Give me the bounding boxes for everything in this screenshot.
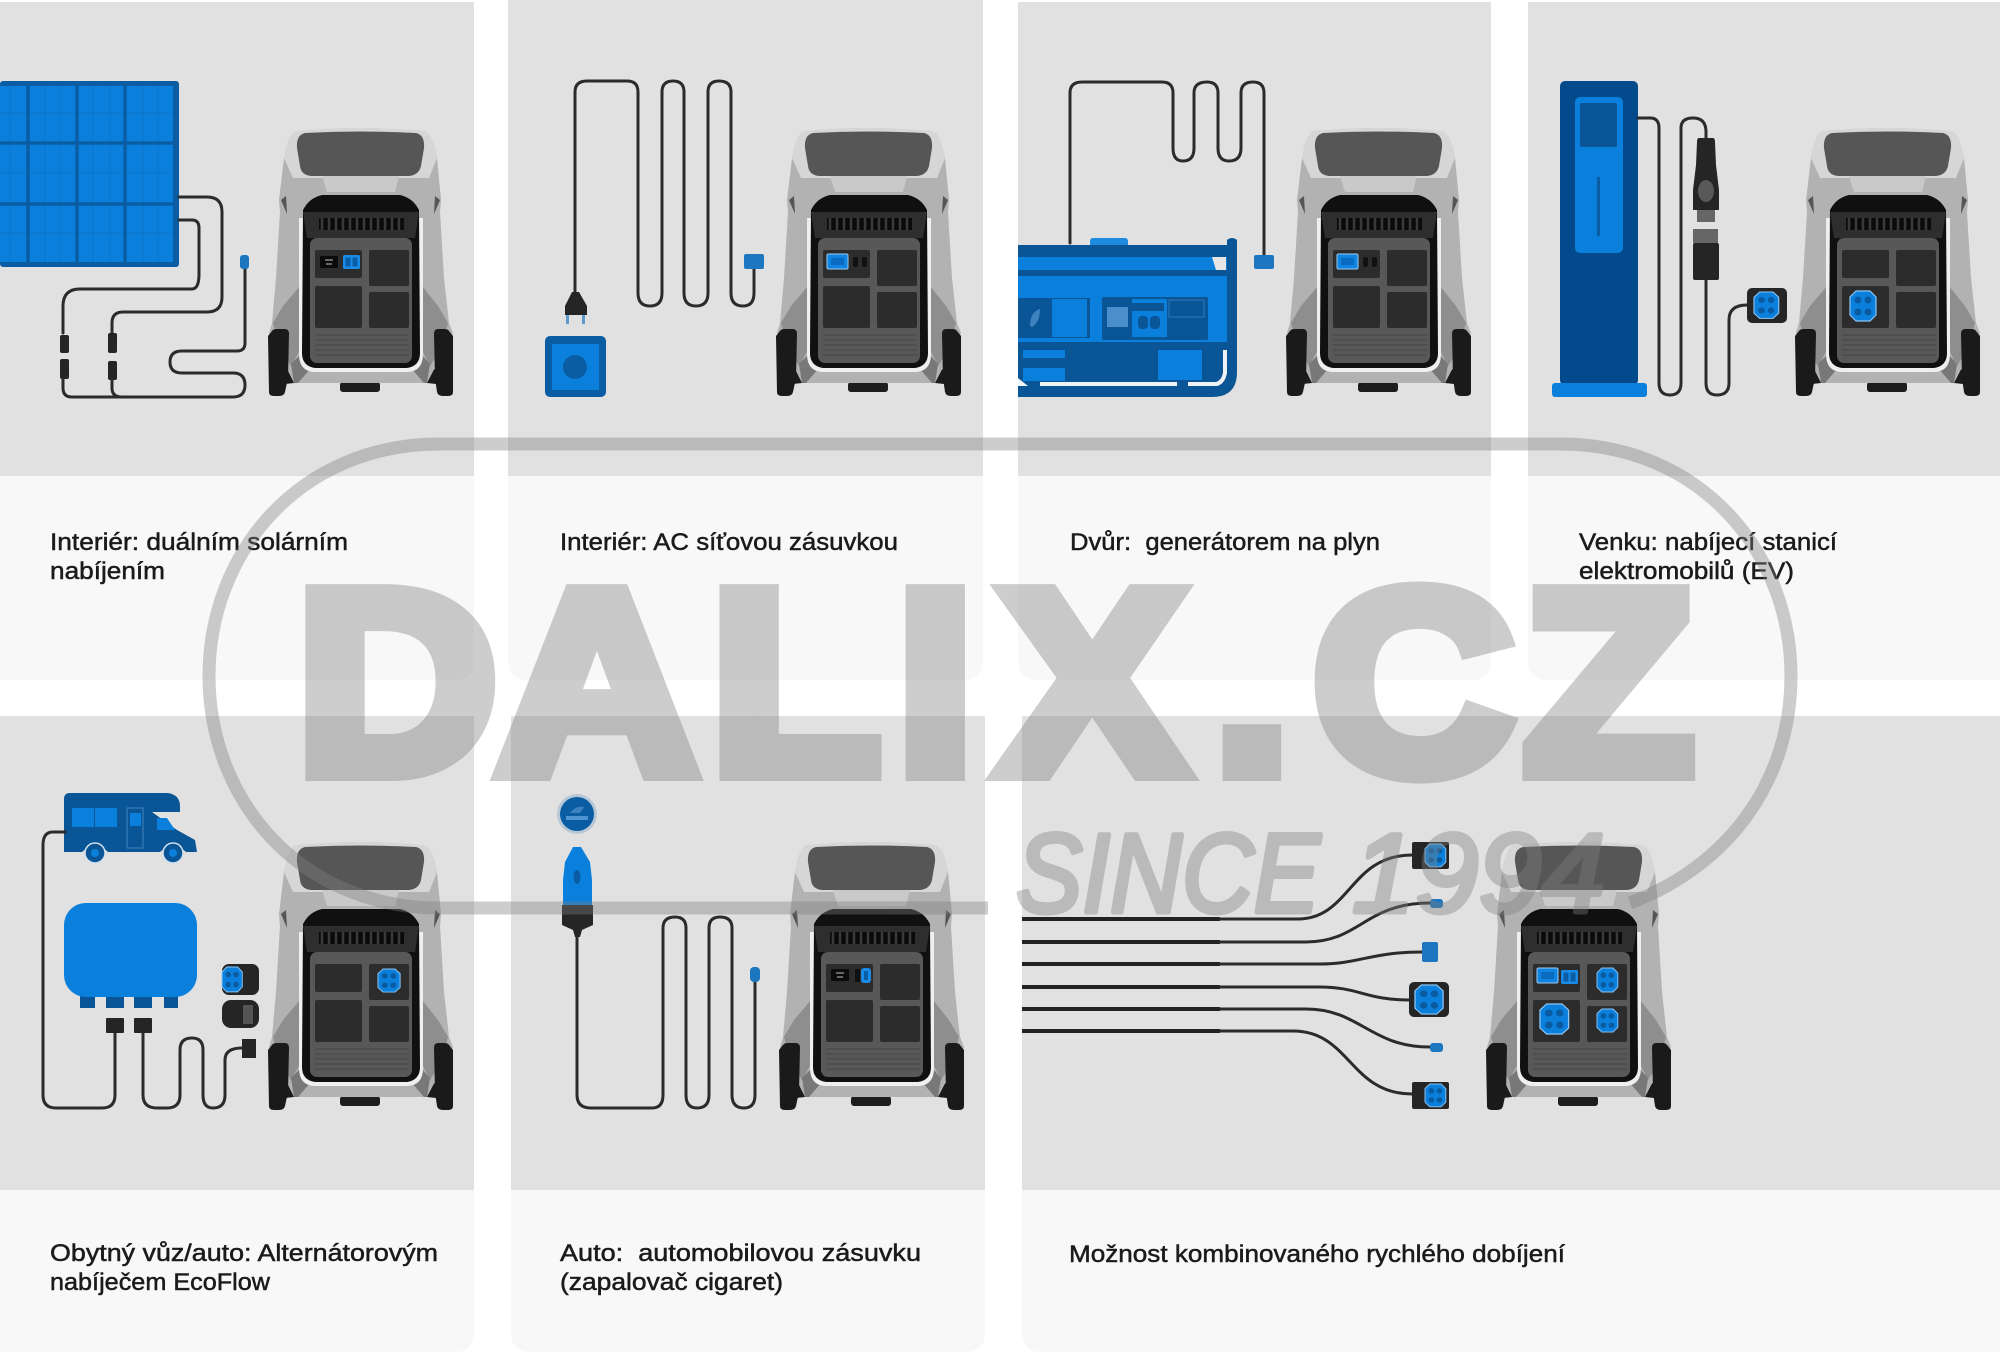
caption: nabíječem EcoFlow bbox=[50, 1269, 271, 1296]
panel: combined fast charging bbox=[1022, 716, 2000, 1352]
watermark oval outline bbox=[209, 444, 1791, 908]
caption: Venku: nabíjecí stanicí bbox=[1579, 529, 1837, 556]
panel: solar charging bbox=[0, 2, 474, 680]
power station bbox=[1795, 128, 1980, 396]
power station bbox=[268, 128, 453, 396]
icon: camper van bbox=[64, 793, 197, 863]
icon: car socket bbox=[557, 794, 597, 834]
icon: alternator charger bbox=[64, 903, 197, 1008]
cables: alternator bbox=[43, 832, 259, 1108]
caption: nabíjením bbox=[50, 558, 165, 585]
icon: generator bbox=[1018, 238, 1237, 397]
panel: car cigarette socket charging bbox=[511, 716, 985, 1352]
power station bbox=[779, 842, 964, 1110]
icon: EV charging station bbox=[1552, 81, 1647, 397]
watermark: DALIX.CZ bbox=[209, 444, 1791, 936]
power station bbox=[1486, 842, 1671, 1110]
cable: EV adapter bbox=[1638, 118, 1787, 395]
watermark tagline: 1994 bbox=[1352, 811, 1605, 936]
caption: Interiér: AC síťovou zásuvkou bbox=[560, 529, 898, 556]
cables: combined inputs bbox=[1022, 842, 1449, 1109]
caption: Interiér: duálním solárním bbox=[50, 529, 348, 556]
panel: gas generator charging bbox=[1018, 2, 1491, 680]
caption: Dvůr: generátorem na plyn bbox=[1070, 529, 1380, 556]
icon: wall socket bbox=[545, 336, 606, 397]
panel: alternator charging bbox=[0, 716, 474, 1352]
cable: generator bbox=[1070, 82, 1274, 269]
power station bbox=[268, 842, 453, 1110]
caption: Auto: automobilovou zásuvku bbox=[560, 1240, 921, 1267]
caption: Možnost kombinovaného rychlého dobíjení bbox=[1069, 1241, 1565, 1268]
cables: solar connection bbox=[60, 197, 249, 397]
caption: (zapalovač cigaret) bbox=[560, 1269, 783, 1296]
panel: EV station charging bbox=[1528, 2, 2000, 680]
watermark tagline: SINCE bbox=[1016, 811, 1321, 936]
power station bbox=[1286, 128, 1471, 396]
cable: AC bbox=[565, 81, 764, 324]
caption: elektromobilů (EV) bbox=[1579, 558, 1794, 585]
power station bbox=[776, 128, 961, 396]
caption: Obytný vůz/auto: Alternátorovým bbox=[50, 1240, 438, 1267]
icon: solar panel bbox=[0, 81, 179, 267]
icon: car plug and cable bbox=[562, 847, 760, 1108]
watermark wordmark: DALIX.CZ bbox=[296, 537, 1694, 828]
panel: AC outlet charging bbox=[508, 0, 983, 680]
